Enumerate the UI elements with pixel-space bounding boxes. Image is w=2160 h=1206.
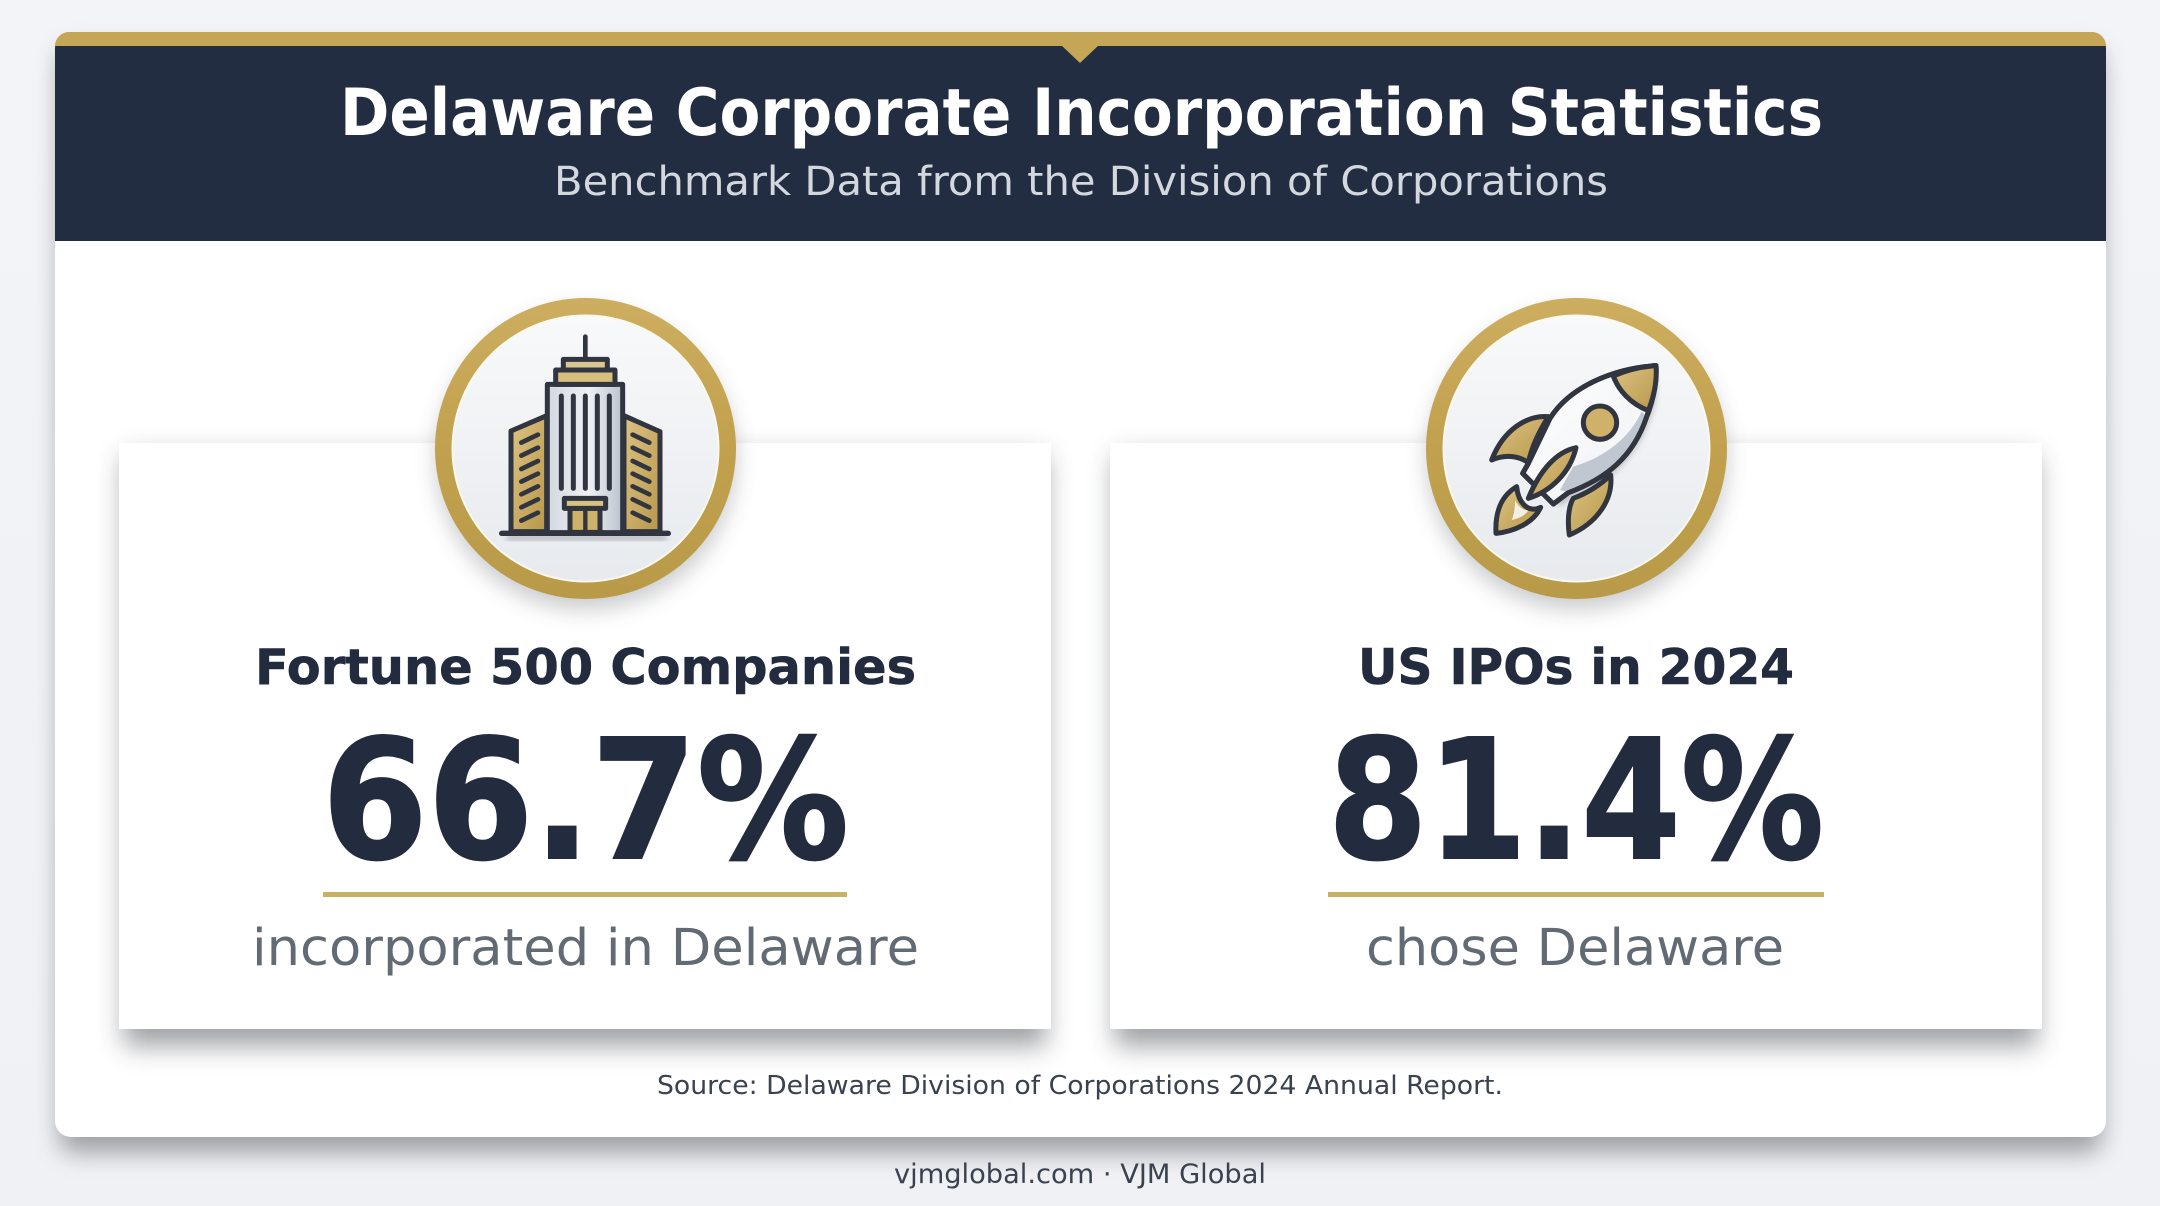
icon: rocket bbox=[1426, 298, 1727, 610]
gold notch bbox=[1061, 45, 1099, 63]
footer credit: vjmglobal.com · VJM Global bbox=[894, 1159, 1266, 1190]
title: Delaware Corporate Incorporation Statistics bbox=[340, 76, 1823, 151]
heading: US IPOs in 2024: US IPOs in 2024 bbox=[1358, 639, 1794, 696]
icon: office building bbox=[435, 298, 736, 610]
gold top bar bbox=[55, 32, 2106, 48]
source note: Source: Delaware Division of Corporations 2024 Annual Report. bbox=[657, 1071, 1503, 1101]
gold rule bbox=[1328, 892, 1824, 897]
panel: Fortune 500 bbox=[119, 443, 1051, 1046]
header band bbox=[55, 32, 2106, 241]
heading: Fortune 500 Companies: Fortune 500 Companies bbox=[255, 639, 916, 696]
gold rule bbox=[323, 892, 847, 897]
stat: 81.4%: 81.4% bbox=[1328, 705, 1824, 898]
stat: 66.7%: 66.7% bbox=[322, 705, 849, 898]
subtitle: Benchmark Data from the Division of Corporations bbox=[554, 159, 1608, 205]
label: incorporated in Delaware: incorporated in Delaware bbox=[252, 919, 919, 978]
panel: US IPOs bbox=[1110, 443, 2042, 1046]
label: chose Delaware: chose Delaware bbox=[1366, 919, 1784, 978]
